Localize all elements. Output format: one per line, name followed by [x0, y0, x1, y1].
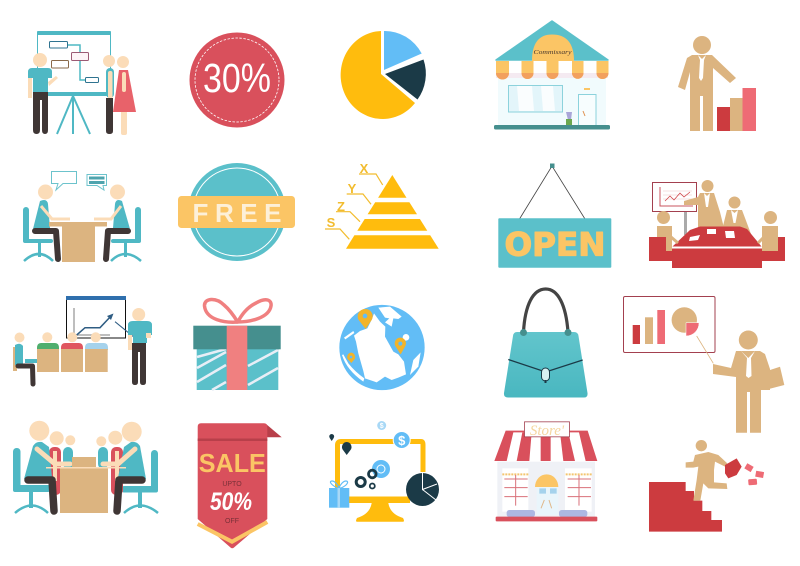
bar chart [717, 88, 756, 131]
pyramid labels [325, 161, 383, 239]
pyramid labels: X [360, 161, 369, 176]
businessman [713, 330, 784, 433]
right window [565, 468, 592, 512]
team on right [96, 422, 146, 511]
badge: FREE: FREE [192, 198, 282, 228]
bag handle [524, 289, 568, 332]
left attendee [657, 211, 672, 251]
icon: boardroom meeting red [649, 180, 785, 268]
globe ocean [339, 305, 425, 390]
briefcase [725, 458, 742, 478]
badge: FREE [178, 163, 295, 261]
bag flap line [508, 360, 583, 372]
discount text: 50% [210, 488, 252, 516]
projection board [66, 296, 126, 338]
store sign: Store' [530, 423, 565, 439]
shop sign: Commissary [534, 49, 572, 56]
badge: 30% [190, 32, 284, 128]
pie chart [341, 31, 426, 119]
icon: shop with teal roof [494, 21, 610, 130]
upto text: UPTO [222, 481, 242, 488]
icon: businessman running upstairs [649, 440, 764, 532]
icon: round table team [13, 421, 158, 513]
chart board [652, 182, 696, 235]
store base [496, 517, 597, 521]
right attendee [762, 211, 778, 251]
icon: businessman presenting charts [624, 296, 784, 433]
sign: OPEN [498, 164, 611, 268]
monitor [338, 442, 423, 522]
pyramid diagram [325, 161, 439, 249]
dollar coins [377, 421, 410, 448]
team on left [24, 421, 75, 511]
pyramid tiers [346, 175, 439, 249]
gift lid [193, 326, 281, 349]
store wall [497, 462, 595, 517]
table [664, 226, 770, 268]
icon: chart presentation to audience [13, 296, 152, 385]
left person [33, 184, 70, 259]
potted plant [566, 112, 572, 125]
awning [494, 431, 597, 461]
icon: teal handbag [504, 289, 588, 398]
gift box body [197, 349, 278, 390]
table [46, 457, 126, 513]
ribbon body [198, 423, 267, 548]
man listening [103, 55, 115, 134]
pyramid labels: S [327, 215, 336, 230]
shop awning [496, 61, 608, 80]
hanging cord [520, 166, 585, 219]
speech bubble with lines [87, 174, 106, 190]
left window [502, 468, 528, 512]
pyramid labels: Z [337, 199, 345, 214]
icon: discussion at table [23, 172, 141, 262]
off text: OFF [225, 518, 239, 525]
gift stripes [197, 349, 278, 390]
continents [342, 307, 421, 382]
icon: globe with pins [339, 305, 425, 390]
shop window [508, 86, 562, 112]
right person [94, 184, 130, 259]
runner [686, 440, 727, 501]
pin [550, 164, 554, 168]
dollar coins: $ [398, 433, 406, 448]
chevron [198, 522, 267, 542]
standing presenter [684, 180, 724, 228]
icon: online shopping monitor [329, 421, 439, 522]
badge: 30%: 30% [203, 55, 271, 101]
handle mounts [520, 329, 572, 336]
ribbon fold [266, 424, 282, 437]
map markers [329, 434, 352, 455]
shop door [578, 88, 596, 126]
table [49, 222, 107, 262]
seated colleague [722, 196, 751, 234]
pyramid labels: Y [348, 181, 357, 196]
gift box [329, 481, 349, 508]
ribbon: sale [198, 423, 282, 548]
stairs [649, 482, 722, 532]
shrubs [507, 510, 587, 517]
businessman [678, 36, 736, 131]
open text: OPEN [504, 226, 606, 264]
chart board [624, 296, 715, 352]
flowchart board [37, 31, 111, 134]
bag clasp [542, 368, 550, 383]
standing presenter [128, 308, 152, 385]
bag body [504, 332, 588, 398]
pointer [697, 336, 713, 363]
location pins [347, 309, 406, 363]
icon: flowchart presentation [28, 31, 136, 135]
sale text: SALE [199, 448, 266, 478]
shop wall [498, 72, 606, 126]
gift bow [204, 299, 271, 322]
dark pie chart [406, 473, 439, 506]
icon: red awning store [494, 422, 597, 521]
left chair [13, 448, 50, 513]
store door [535, 474, 558, 515]
woman in red dress [113, 56, 136, 135]
speech bubble empty [52, 172, 76, 190]
pointer [115, 322, 135, 338]
right chair [111, 207, 141, 261]
icon: gift box [193, 299, 281, 390]
dollar coins: $ [380, 423, 384, 430]
fold line [198, 438, 267, 441]
red seats [649, 237, 785, 261]
shop base [494, 125, 610, 130]
presenter [28, 53, 58, 134]
icon: businessman with bar chart [678, 36, 756, 131]
flying papers [744, 463, 764, 485]
shop roof [496, 21, 608, 60]
right chair [122, 450, 158, 513]
sign board [498, 218, 611, 268]
seated person at left [13, 332, 37, 384]
audience row [37, 332, 108, 372]
left chair [23, 207, 53, 261]
gears and blue circle [356, 460, 390, 488]
gift ribbon [227, 326, 247, 390]
